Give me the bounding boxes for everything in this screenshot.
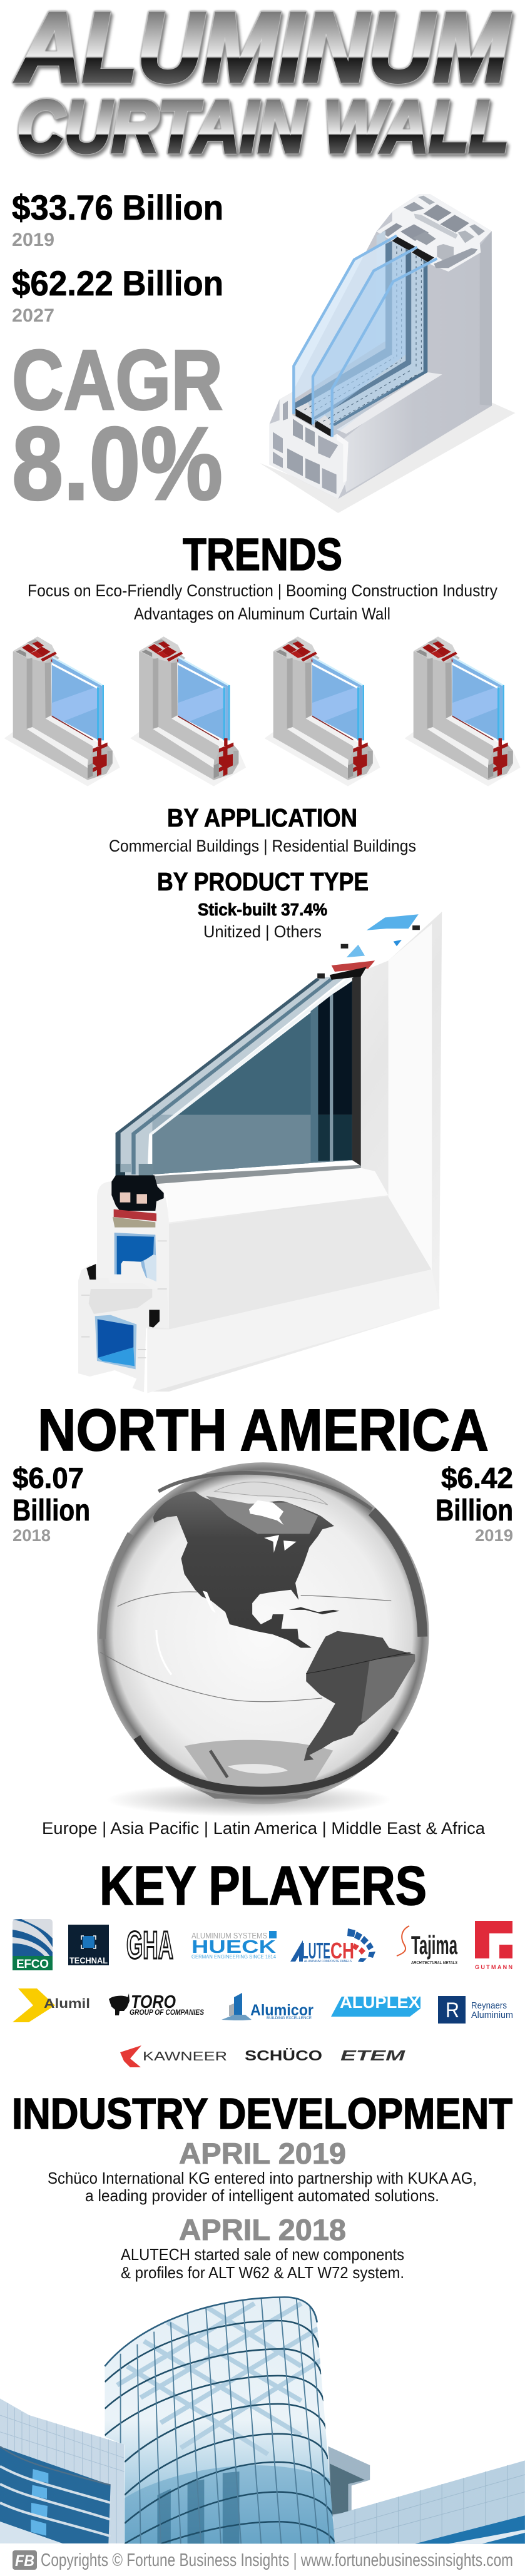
logo: Technal xyxy=(68,1925,109,1965)
footer: copyright xyxy=(13,2550,513,2570)
stat: 2027 value: $62.22 Billion xyxy=(12,263,223,303)
callout: 2019 value: Billion xyxy=(436,1494,513,1527)
logo: Etem: ETEM xyxy=(340,2047,405,2064)
logo: Gutmann xyxy=(475,1921,512,1970)
text: product type list: Unitized | Others xyxy=(203,922,322,941)
stat: 2027 value: 2027 xyxy=(12,305,54,326)
heading: by application: BY APPLICATION xyxy=(167,803,357,832)
stat: 2019 value: 2019 xyxy=(12,230,54,250)
icon row: small window frames xyxy=(4,636,521,787)
logo: Toro: TORO xyxy=(131,1992,176,2012)
logo: Toro: GROUP OF COMPANIES xyxy=(130,2008,204,2017)
logo: EFCO: EFCO xyxy=(16,1958,49,1971)
icon: window frame 4 xyxy=(405,636,521,787)
logo: Alumicor xyxy=(222,1993,313,2020)
callout: 2019 value: $6.42 xyxy=(441,1462,513,1494)
logo: Alutech: LUTE xyxy=(302,1938,330,1963)
stat: 2019 value: $33.76 Billion xyxy=(12,188,223,227)
logo: Technal: TECHNAL xyxy=(69,1955,108,1965)
stat: 2027 value xyxy=(12,263,223,326)
stat: 2019 value xyxy=(12,188,223,250)
logo: Hueck: GERMAN ENGINEERING SINCE 1814 xyxy=(191,1954,277,1960)
callout: 2018 value: 2018 xyxy=(13,1526,51,1545)
logo: S. Tajima xyxy=(397,1926,457,1965)
icon: Fortune Business Insights logo: FB xyxy=(15,2552,34,2570)
illustration: large window section xyxy=(78,912,442,1393)
logo: Alutech: CH xyxy=(330,1938,354,1963)
logo: Alutech xyxy=(290,1928,375,1963)
logo: Toro xyxy=(109,1992,204,2017)
development: april 2018 xyxy=(121,2213,404,2282)
market size stats xyxy=(12,188,223,522)
logo: Reynaers: R xyxy=(446,1998,459,2022)
profile cross-section xyxy=(78,1164,169,1392)
development: april 2019 xyxy=(48,2137,477,2205)
development: april 2018: & profiles for ALT W62 & ALT W72 system. xyxy=(121,2263,404,2282)
text: trend list xyxy=(28,581,497,623)
title xyxy=(14,0,511,168)
callout: 2019 value xyxy=(436,1462,513,1545)
logo: GHA: GHA xyxy=(126,1924,173,1967)
logo: Reynaers: Reynaers xyxy=(471,2000,507,2011)
stat: CAGR: CAGR xyxy=(12,332,223,427)
stat: CAGR xyxy=(12,332,223,522)
text: trend list: Advantages on Aluminum Curtain Wall xyxy=(134,604,390,623)
logo: Alumil xyxy=(13,1988,90,2022)
logo: EFCO xyxy=(13,1919,53,1971)
logo: Hueck: HUECK xyxy=(191,1937,276,1957)
logo: S. Tajima: Tajima xyxy=(411,1930,457,1960)
callout: 2018 value: Billion xyxy=(13,1494,90,1527)
logo: Aluplex xyxy=(331,1993,421,2017)
callout: 2019 value: 2019 xyxy=(475,1526,513,1545)
logo: Kawneer: KAWNEER xyxy=(143,2050,227,2064)
text: other regions: Europe | Asia Pacific | Latin America | Middle East & Africa xyxy=(42,1819,486,1838)
icon: window frame 1 xyxy=(4,636,120,787)
icon: window frame 3 xyxy=(265,636,380,787)
logo: Alumil: Alumil xyxy=(44,1997,90,2011)
text: application list: Commercial Buildings | Residential Buildings xyxy=(109,837,416,855)
logo: Reynaers: Aluminium xyxy=(471,2010,513,2020)
development: april 2018: ALUTECH started sale of new components xyxy=(121,2245,404,2264)
logo: Hueck xyxy=(191,1931,277,1960)
development: april 2019: APRIL 2019 xyxy=(179,2137,346,2170)
logo: S. Tajima: ARCHITECTURAL METALS xyxy=(410,1961,457,1965)
logo: Alutech: ALUMINIUM COMPOSITE PANELS xyxy=(304,1960,352,1963)
stat: CAGR: 8.0% xyxy=(12,406,223,522)
logo: Gutmann: GUTMANN xyxy=(475,1964,512,1970)
development: april 2019: a leading provider of intelligent automated solutions. xyxy=(85,2186,439,2205)
heading: trends: TRENDS xyxy=(183,530,342,580)
icon: window frame 2 xyxy=(130,636,246,787)
logo: Reynaers xyxy=(438,1996,513,2024)
illustration: glass curtain wall building xyxy=(0,2297,525,2543)
logo: Schuco: SCHÜCO xyxy=(245,2047,322,2064)
building: left wing xyxy=(0,2398,124,2543)
logo: Aluplex: ALUPLEX xyxy=(340,1993,421,2012)
heading: by product type: BY PRODUCT TYPE xyxy=(157,867,369,896)
heading: key players: KEY PLAYERS xyxy=(99,1855,427,1917)
illustration: window profile cutaway xyxy=(260,194,515,513)
logo: Alumicor: Alumicor xyxy=(250,2002,313,2019)
building: right wing and tower xyxy=(104,2297,525,2543)
callout: 2018 value: $6.07 xyxy=(13,1462,84,1494)
logo: Alumicor: BUILDING EXCELLENCE xyxy=(267,2017,312,2020)
logo: Hueck: ALUMINIUM SYSTEMS xyxy=(191,1931,267,1940)
text: stick-built share: Stick-built 37.4% xyxy=(198,900,327,919)
development: april 2019: Schüco International KG entered into partnership with KUKA AG, xyxy=(48,2169,477,2187)
callout: 2018 value xyxy=(13,1462,90,1545)
illustration: glass globe xyxy=(97,1462,429,1816)
development: april 2018: APRIL 2018 xyxy=(179,2213,346,2246)
logos xyxy=(13,1919,513,2067)
logo: Kawneer xyxy=(120,2045,227,2067)
window face and glass xyxy=(116,912,442,1393)
